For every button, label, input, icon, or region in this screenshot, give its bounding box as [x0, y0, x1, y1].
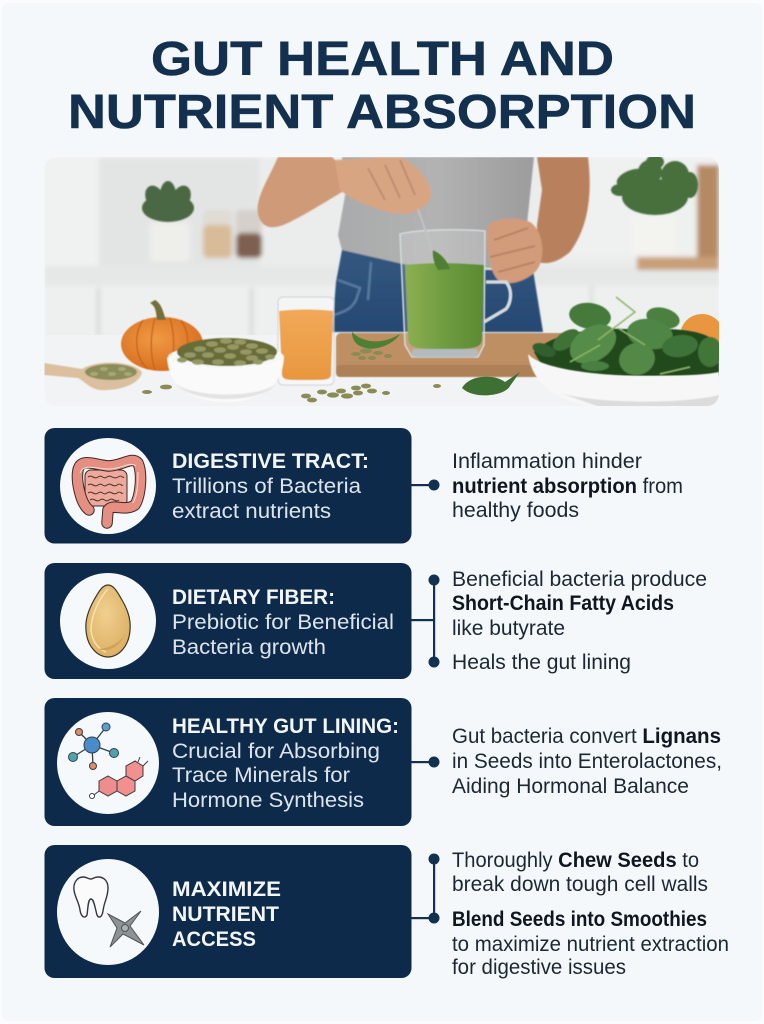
text: inflammation — [452, 449, 683, 522]
heading and description: extract nutrients — [172, 499, 331, 523]
pitcher of green smoothie — [400, 209, 511, 357]
connector: maximize nutrient access — [411, 854, 440, 924]
heading and description: DIGESTIVE TRACT: — [172, 450, 369, 473]
icon: intestines — [60, 438, 156, 534]
text: short-chain fatty acids: Heals the gut lining — [452, 650, 631, 674]
heading and description: Prebiotic for Beneficial — [172, 610, 394, 634]
bowl of pumpkin seeds — [167, 338, 284, 402]
text: lignans: in Seeds into Enterolactones, — [452, 749, 722, 773]
connector: digestive tract — [411, 480, 440, 490]
heading: NUTRIENT — [172, 903, 279, 926]
kitchen background — [44, 157, 719, 335]
text: chew and blend seeds: Thoroughly Chew Seeds to — [452, 848, 699, 872]
text: lignans: Aiding Hormonal Balance — [452, 774, 689, 798]
icon: pumpkin seed — [60, 573, 156, 669]
right plant — [611, 155, 698, 215]
spinach leaf on board — [352, 332, 400, 349]
title: NUTRIENT ABSORPTION — [68, 86, 696, 139]
title — [68, 33, 696, 139]
wooden spoon of seeds — [44, 363, 142, 390]
person — [258, 157, 590, 332]
text: chew and blend seeds: Blend Seeds into Smoothies — [452, 907, 707, 931]
white spinach bowl — [528, 354, 719, 407]
glass of orange juice — [278, 297, 334, 385]
panel: maximize nutrient access — [44, 845, 412, 978]
text: chew and blend seeds: break down tough cell walls — [452, 872, 708, 896]
heading and description: Trace Minerals for — [172, 763, 350, 787]
heading and description: HEALTHY GUT LINING: — [172, 715, 399, 738]
text: inflammation: nutrient absorption from — [452, 474, 683, 498]
heading: ACCESS — [172, 928, 256, 951]
connector: dietary fiber — [411, 574, 440, 668]
pumpkin — [121, 300, 203, 371]
heading: MAXIMIZE — [172, 878, 281, 901]
heading and description: Crucial for Absorbing — [172, 739, 380, 763]
text: chew and blend seeds — [452, 848, 729, 979]
heading and description — [172, 450, 369, 523]
heading and description: Hormone Synthesis — [172, 788, 364, 812]
countertop — [96, 335, 254, 338]
text: inflammation: Inflammation hinder — [452, 449, 642, 473]
left plant — [141, 181, 195, 222]
heading and description: Bacteria growth — [172, 635, 326, 659]
icon: tooth and blender blade — [57, 859, 159, 965]
text: chew and blend seeds: to maximize nutrient extraction — [452, 932, 729, 956]
text: short-chain fatty acids: Short-Chain Fatty Acids — [452, 591, 674, 615]
panel: healthy gut lining — [44, 698, 412, 826]
text: short-chain fatty acids: like butyrate — [452, 616, 565, 640]
spinach leaves — [531, 297, 722, 379]
text: short-chain fatty acids — [452, 567, 707, 674]
text: lignans — [452, 724, 722, 798]
heading and description: Trillions of Bacteria — [172, 474, 361, 498]
text: chew and blend seeds: for digestive issues — [452, 955, 626, 979]
cutting board — [336, 333, 566, 377]
panel: digestive tract — [44, 428, 412, 544]
title: GUT HEALTH AND — [151, 33, 614, 86]
heading and description — [172, 586, 394, 659]
heading and description: DIETARY FIBER: — [172, 586, 335, 609]
icon: molecules — [57, 712, 159, 814]
panel: dietary fiber — [44, 563, 412, 679]
text: lignans: Gut bacteria convert Lignans — [452, 724, 721, 748]
scattered seeds — [142, 349, 441, 402]
heading — [172, 878, 281, 951]
text: inflammation: healthy foods — [452, 498, 579, 522]
photo: person blending a green smoothie with seeds, pumpkin and spinach — [44, 155, 724, 407]
heading and description — [172, 715, 399, 812]
text: short-chain fatty acids: Beneficial bacteria produce — [452, 567, 707, 591]
spinach leaf on counter — [462, 372, 520, 395]
orange — [680, 314, 719, 344]
connector: healthy gut lining — [411, 756, 440, 768]
